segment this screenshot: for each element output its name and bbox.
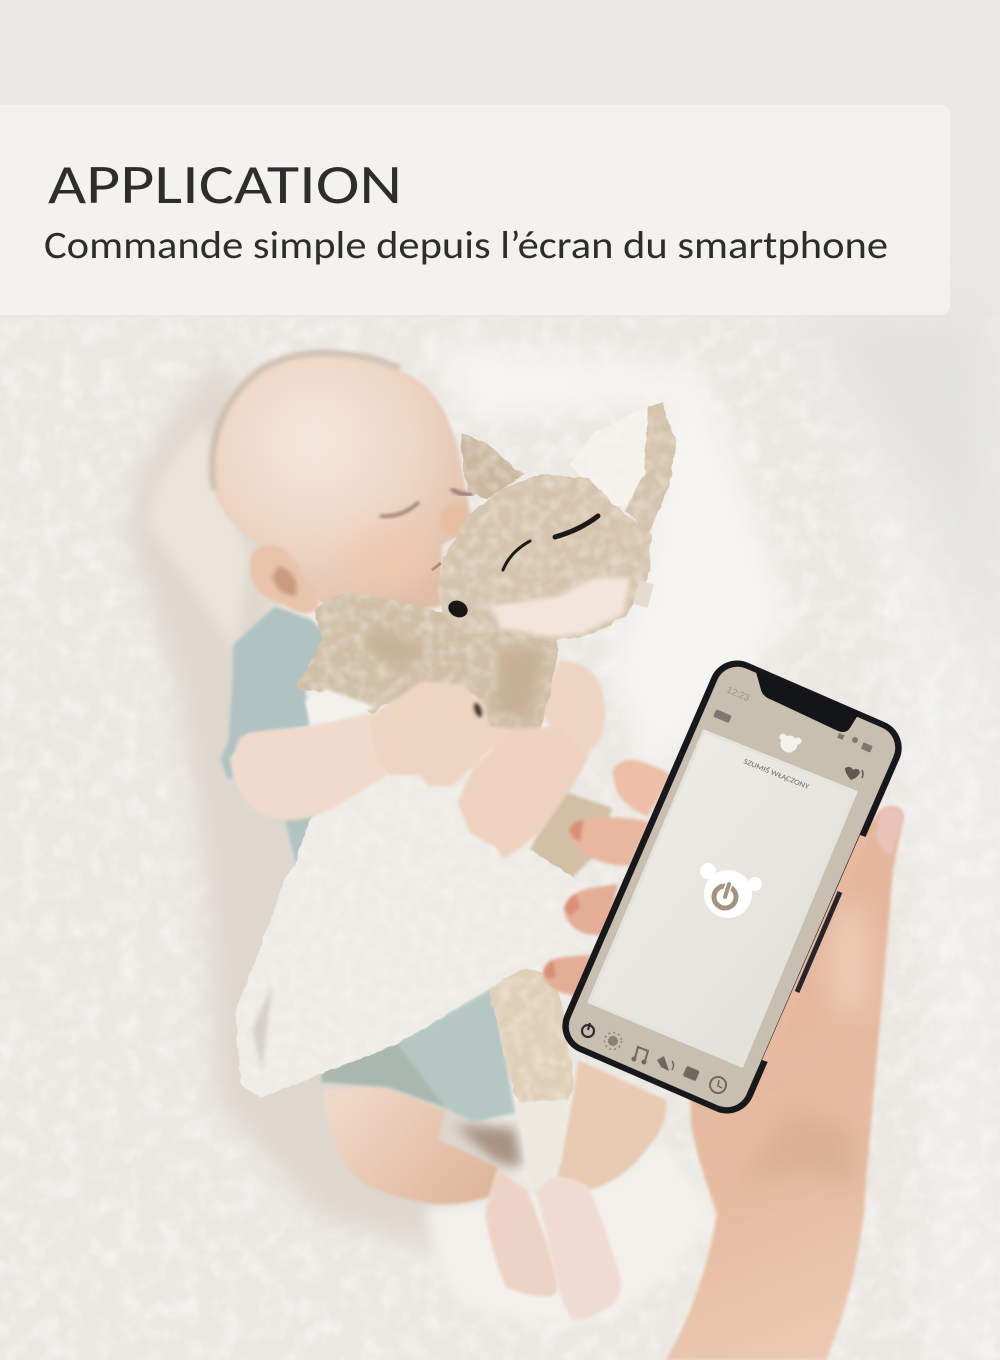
- hand skin over phone edge: [762, 835, 869, 1063]
- pillow highlight: [148, 420, 250, 650]
- visible phone edge: [797, 892, 840, 992]
- baby shirt: [225, 611, 326, 775]
- white cloth: [239, 775, 600, 1093]
- palm highlight: [826, 900, 874, 1020]
- ear: [250, 545, 319, 613]
- baby legs and feet: [323, 1060, 666, 1320]
- status label: SZUMIŚ WŁĄCZONY: [742, 757, 811, 792]
- plush nose: [446, 598, 470, 620]
- phone body: [553, 652, 911, 1122]
- clock text: 12:23: [725, 685, 751, 704]
- holding hand: fingers behind phone: [543, 760, 672, 996]
- baby head: [212, 353, 473, 613]
- baby shorts: [321, 987, 515, 1122]
- fleece blanket: [0, 300, 1000, 1360]
- subtitle: Commande simple depuis l’écran du smartphone: [44, 222, 888, 269]
- closed eye: [380, 502, 419, 516]
- plush lower body: [530, 790, 612, 880]
- nose: [440, 503, 470, 537]
- mouth: [432, 563, 441, 570]
- plush leg: [489, 967, 574, 1103]
- phone screen: [562, 660, 902, 1114]
- header panel: [0, 105, 950, 315]
- plush muzzle: [491, 578, 630, 637]
- white blanket right of baby: [440, 345, 790, 780]
- pillow under feet: [426, 1140, 712, 1322]
- plush tag: [633, 581, 654, 608]
- title: APPLICATION: [48, 151, 402, 219]
- plush white pocket: [305, 689, 373, 723]
- header status icons: [713, 709, 873, 753]
- phone notch: [756, 672, 860, 732]
- bear logo small: [780, 734, 802, 752]
- thumb nail: [876, 807, 903, 856]
- holding hand: palm and thumb: [666, 806, 903, 1360]
- plush back ear: [462, 433, 523, 499]
- bear power button: [700, 863, 762, 918]
- plush head: [441, 478, 648, 637]
- hair fringe: [212, 353, 400, 490]
- screen card: [589, 731, 856, 1066]
- plush eye: [503, 516, 598, 570]
- beige pillow shadow band: [128, 350, 500, 1250]
- wrist shadow: [730, 1110, 855, 1200]
- fox plush: [301, 402, 676, 1190]
- heart sound icon: [845, 767, 863, 780]
- cheek: [348, 521, 432, 589]
- plush ear: [569, 402, 676, 537]
- back arm: [541, 661, 606, 761]
- smartphone: [553, 652, 911, 1122]
- plush body: [301, 597, 555, 730]
- baby arm and hands: [230, 685, 584, 854]
- bottom tab icons: [582, 1023, 726, 1093]
- plush tail tip: [517, 1100, 567, 1190]
